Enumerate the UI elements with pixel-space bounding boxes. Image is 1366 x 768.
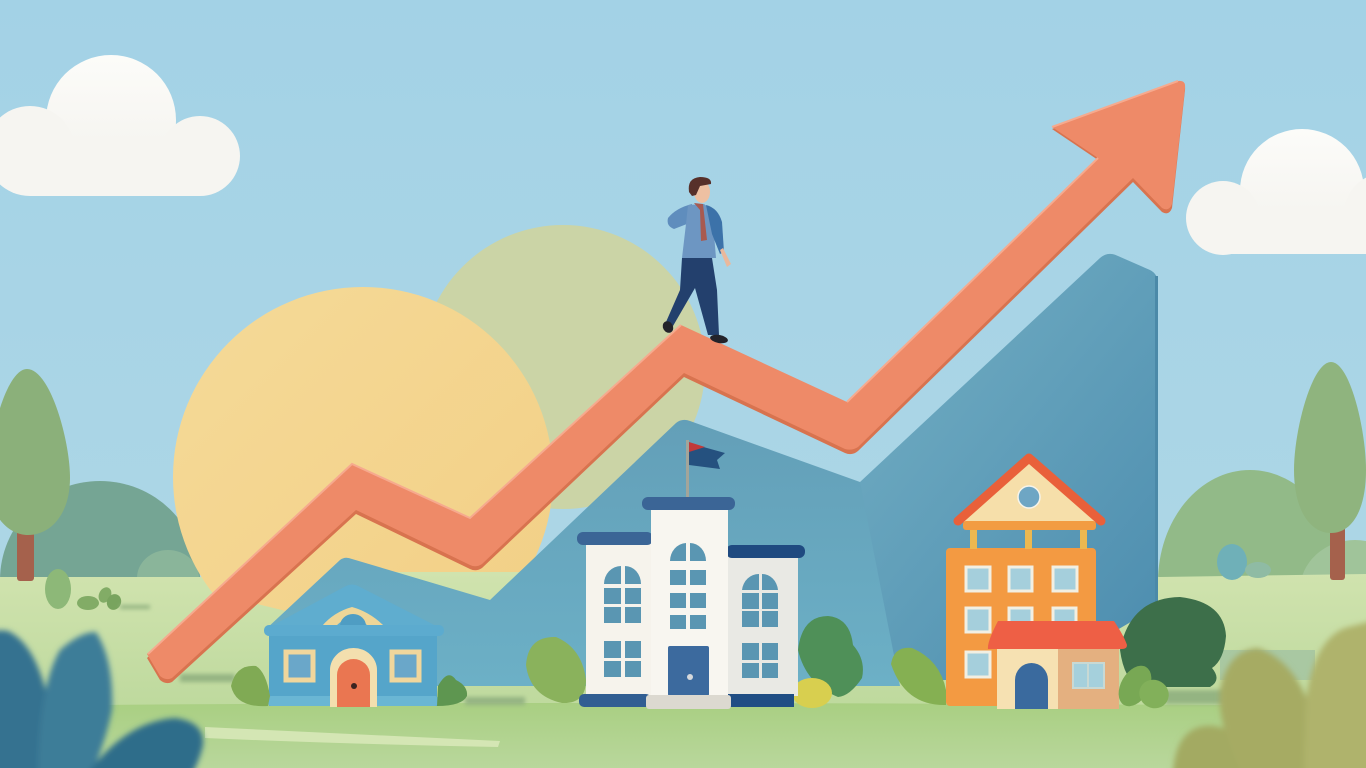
orange building: columns — [970, 529, 1087, 549]
lawn shadows — [120, 605, 1225, 705]
cloud left — [0, 55, 240, 196]
person: shoes — [661, 319, 729, 345]
distant hills left — [0, 481, 200, 679]
central building: windows — [604, 543, 778, 678]
person walking on arrow — [661, 177, 731, 345]
tree left — [0, 369, 70, 581]
tree right — [1294, 362, 1366, 580]
shrub left of orange building — [891, 648, 946, 705]
rising arrow — [147, 81, 1185, 683]
shrubs around central building — [526, 616, 863, 708]
person: torso — [682, 204, 716, 258]
person: right arm — [706, 205, 724, 254]
orange building: windows — [966, 567, 1077, 677]
shrubs near annex — [1112, 660, 1174, 714]
orange building: roof — [958, 458, 1101, 521]
small shrubs — [45, 569, 124, 612]
pale green circle — [421, 225, 705, 509]
foreground foliage right — [1172, 615, 1366, 768]
person: hair — [689, 177, 711, 196]
ground — [0, 572, 1366, 768]
distant hills right — [1158, 470, 1366, 694]
path highlight on lawn — [205, 727, 500, 747]
central building: tower — [651, 508, 728, 698]
sun circle — [173, 287, 552, 611]
dark shrub right of orange building — [1120, 597, 1226, 687]
central building: roof caps and base — [577, 532, 805, 707]
person: head — [694, 181, 710, 203]
person: collar and tie — [694, 203, 707, 241]
central building: steps — [646, 695, 731, 709]
foreground foliage left — [0, 630, 203, 768]
flag — [686, 440, 725, 497]
lower lawn — [0, 703, 1366, 768]
orange building — [946, 458, 1101, 706]
orange building: round window — [1018, 486, 1040, 508]
small annex house — [988, 621, 1127, 709]
cloud right — [1186, 129, 1366, 255]
central building — [577, 497, 805, 709]
central building: side wings — [586, 543, 798, 696]
central building: door — [668, 646, 709, 696]
orange building: entablature — [963, 521, 1096, 530]
shadow strip right lawn — [1220, 650, 1315, 680]
shrubs near blue house — [231, 666, 467, 706]
person: left arm — [668, 204, 692, 229]
mountains — [265, 254, 1158, 686]
blue house — [264, 584, 444, 707]
orange building: gable — [958, 462, 1100, 522]
person: legs — [666, 258, 719, 335]
distant shrubs right — [1217, 544, 1271, 580]
